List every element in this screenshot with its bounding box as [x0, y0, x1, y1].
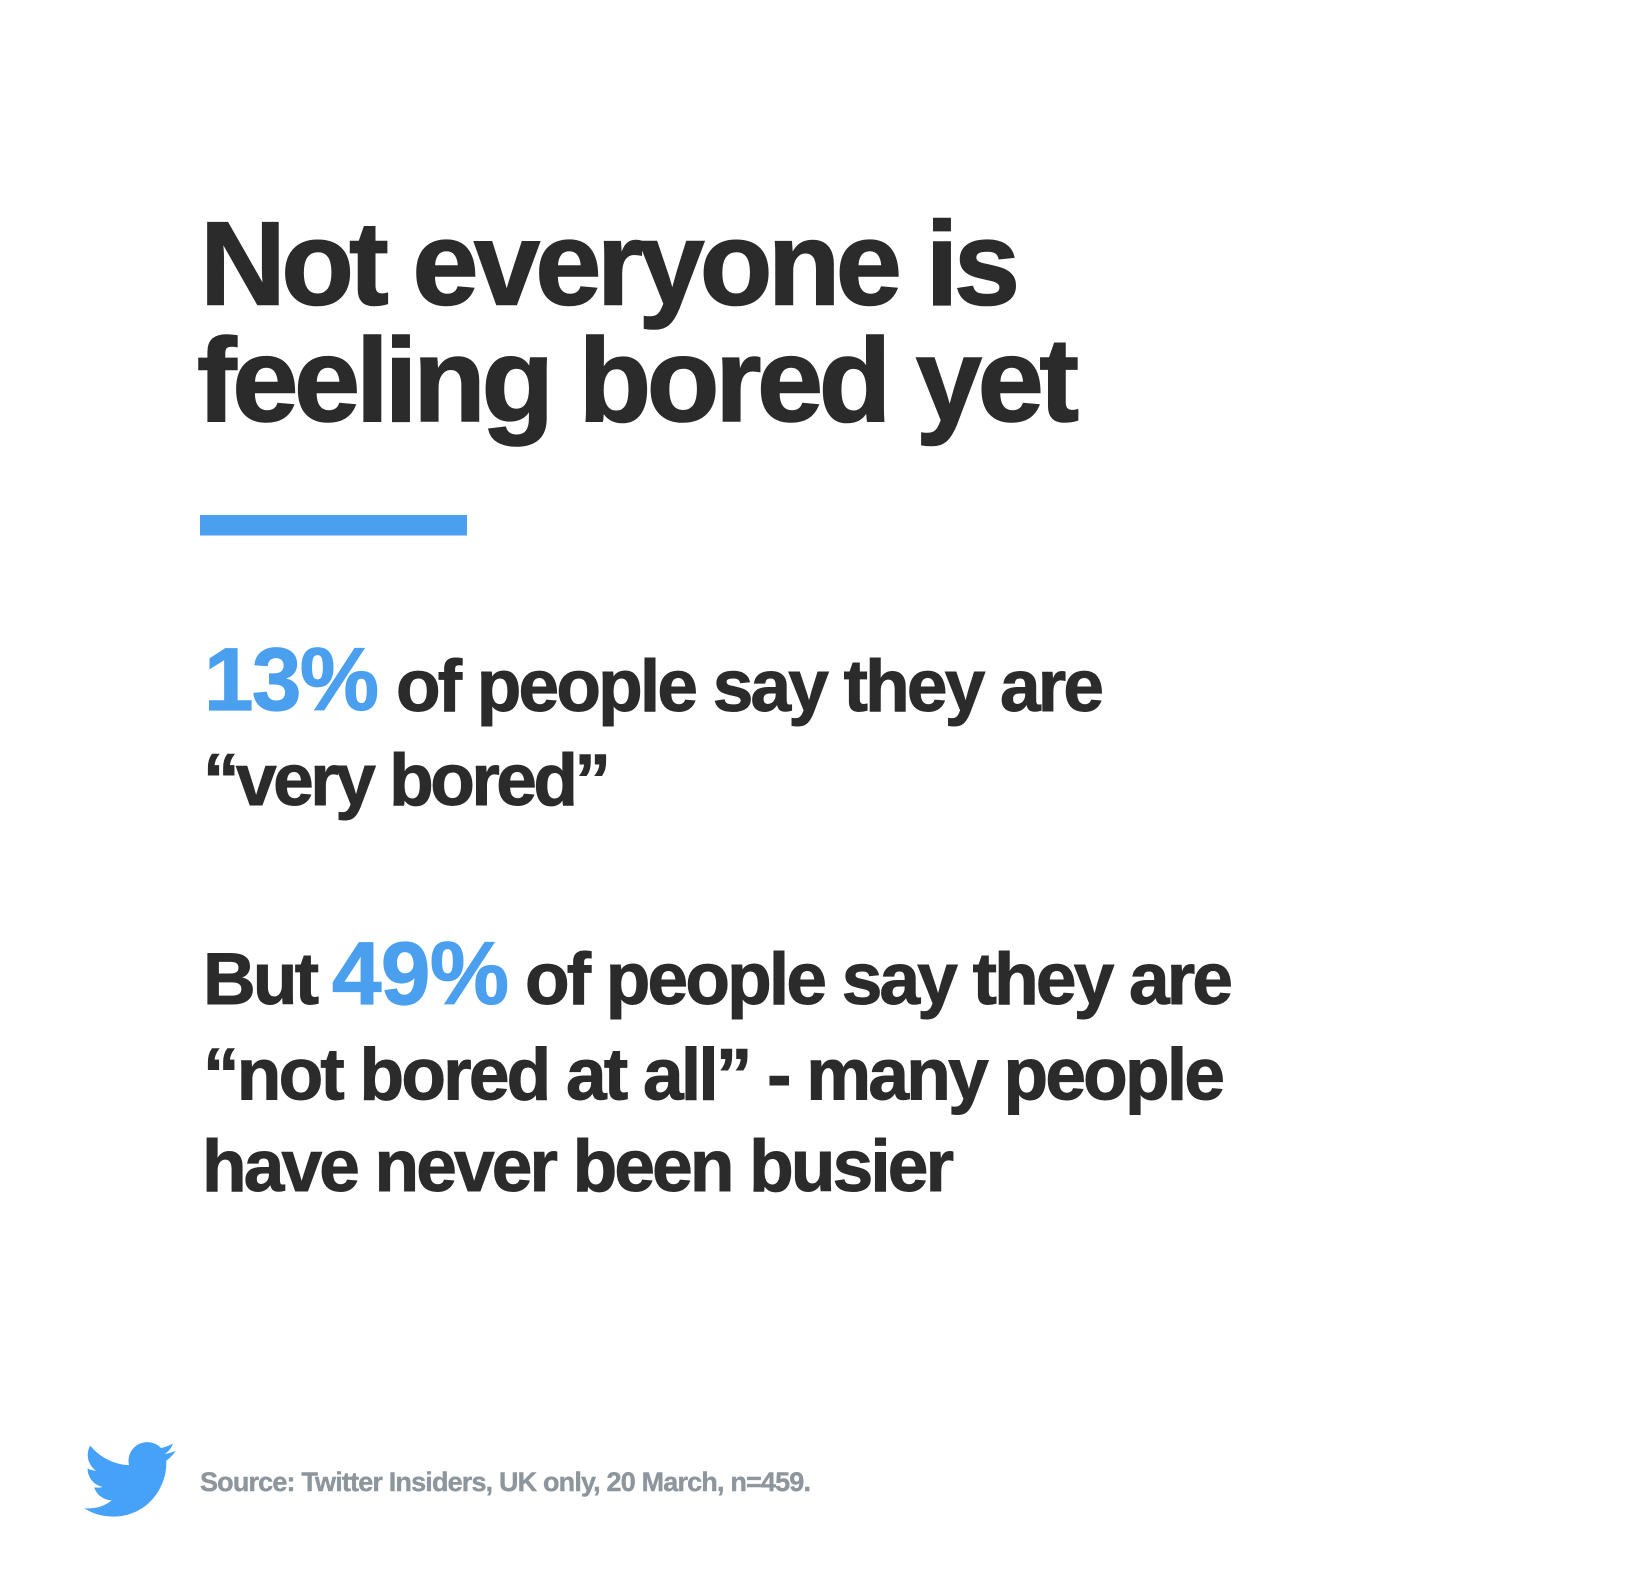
stat: 13%: 13%	[204, 629, 379, 729]
stat: 49%: 49%	[332, 923, 509, 1023]
title: Not everyone is	[200, 198, 1020, 330]
line: have never been busier: have never been busier	[202, 1126, 954, 1207]
source note: Source: Twitter Insiders, UK only, 20 March, n=459.	[200, 1467, 811, 1497]
title	[197, 198, 1079, 447]
title: feeling bored yet	[197, 314, 1079, 447]
line: of people say they are: of people say they are	[396, 646, 1104, 727]
line: of people say they are: of people say they are	[525, 939, 1233, 1020]
icon: twitter bird	[84, 1442, 176, 1517]
text block: 49% not bored	[202, 923, 1233, 1207]
accent bar	[200, 515, 467, 536]
line: But: But	[203, 939, 319, 1020]
line: not bored at all: “not bored at all” - many people	[203, 1034, 1225, 1116]
text block: 13% very bored	[203, 629, 1104, 821]
line: very bored: “very bored”	[203, 740, 611, 821]
